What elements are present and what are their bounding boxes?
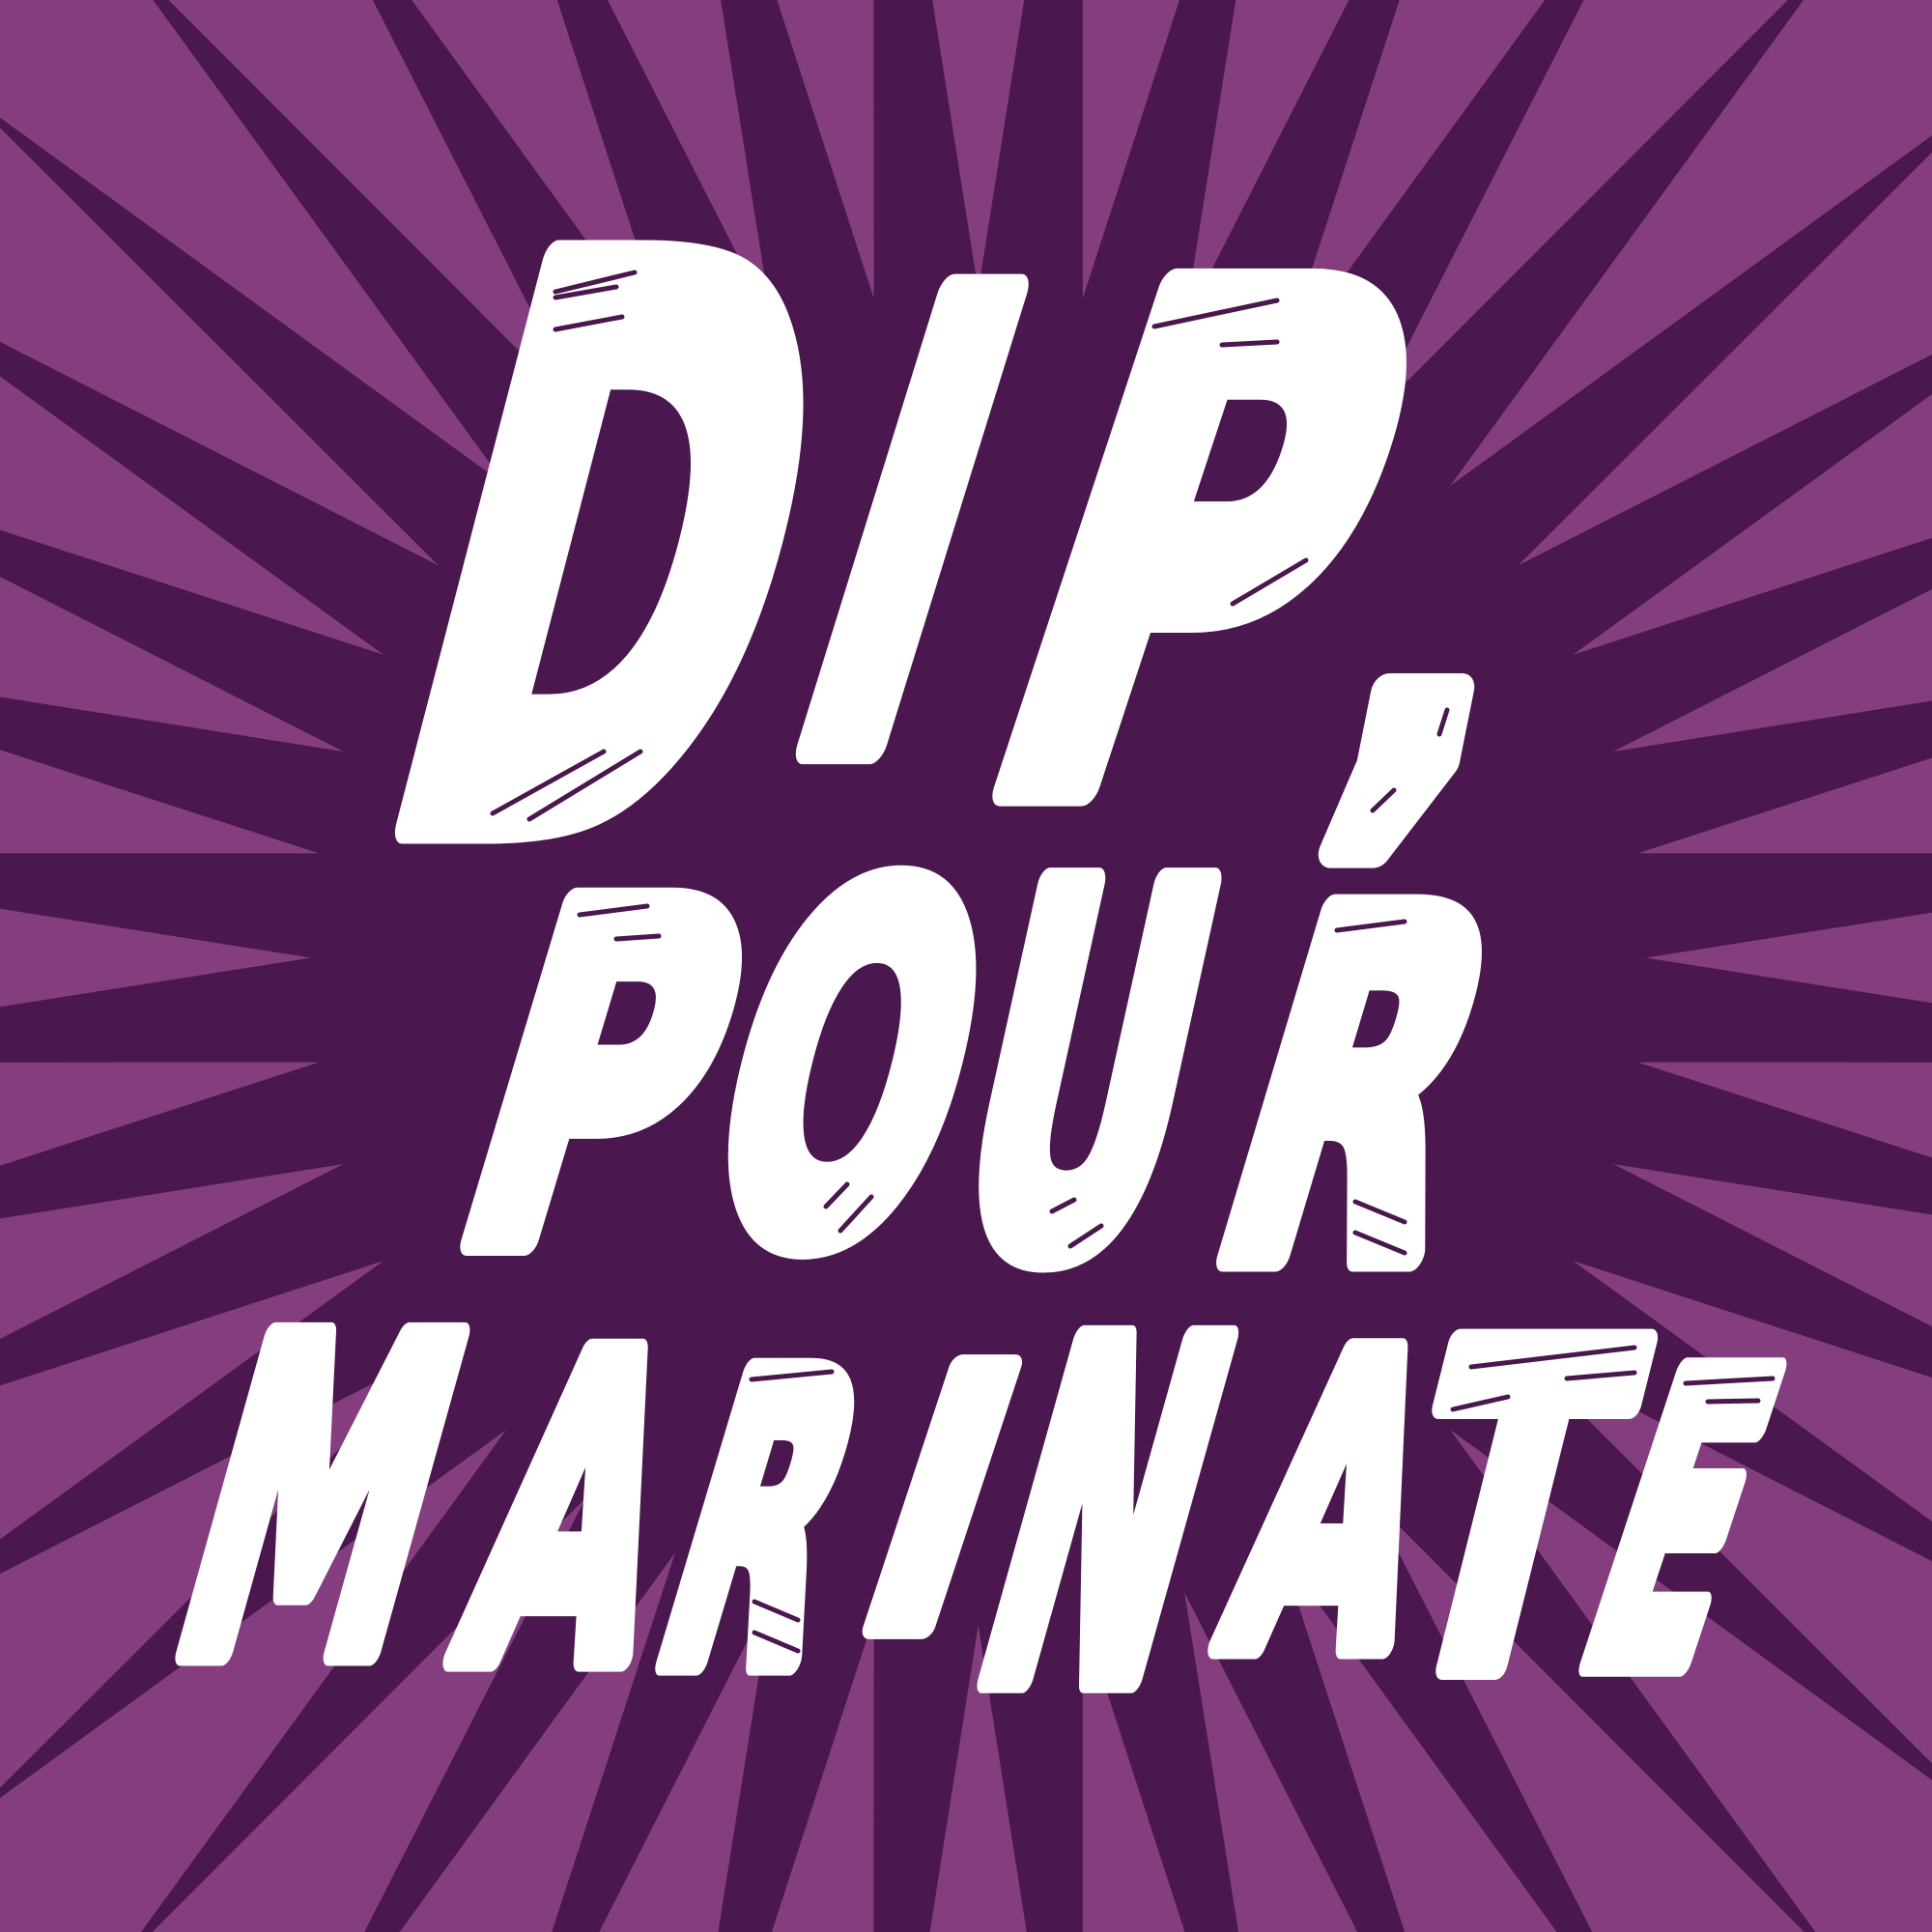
title line: MARINATE: I xyxy=(819,1296,1061,1711)
title line: DIP,: D xyxy=(321,107,907,1008)
title line: MARINATE: N xyxy=(933,1248,1277,1789)
brush streaks xyxy=(493,272,1773,1651)
title line: DIP,: I xyxy=(730,170,1087,891)
title xyxy=(133,107,1820,1789)
title line: POUR: U xyxy=(916,785,1258,1368)
title line: DIP,: , xyxy=(1302,334,1573,896)
title line: POUR xyxy=(411,785,1552,1368)
title line: MARINATE: A xyxy=(425,1270,724,1757)
title line: DIP,: P xyxy=(913,151,1494,950)
title line: MARINATE: R xyxy=(617,1294,908,1756)
title line: MARINATE: A xyxy=(1191,1274,1482,1741)
title line: POUR: O xyxy=(665,794,1035,1350)
title line: POUR: R xyxy=(1167,815,1552,1368)
title line: MARINATE xyxy=(133,1248,1820,1789)
title line: MARINATE: M xyxy=(133,1252,506,1754)
title line: MARINATE: E xyxy=(1539,1293,1820,1757)
title line: DIP, xyxy=(321,107,1573,1008)
title line: MARINATE: T xyxy=(1349,1255,1673,1773)
title line: POUR: P xyxy=(411,810,796,1350)
